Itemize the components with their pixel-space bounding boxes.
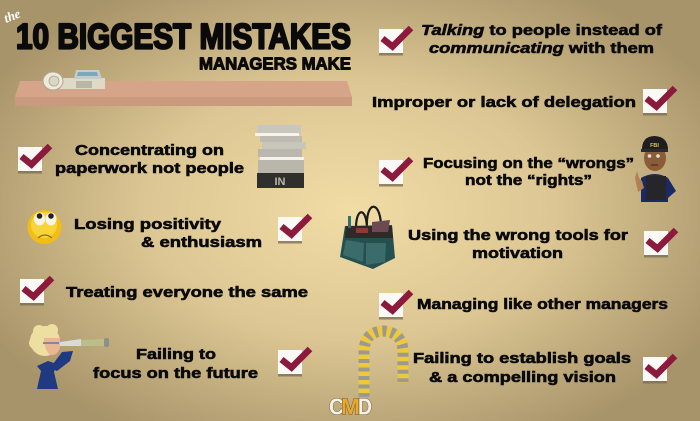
item: focusing on wrongs: Focusing on the “wrongs” <box>423 155 634 172</box>
title: the <box>2 6 23 26</box>
illustration: woman with telescope <box>29 324 109 389</box>
item: wrong tools <box>408 227 676 262</box>
icon: worried emoji <box>28 210 62 244</box>
item: improper delegation <box>372 88 675 116</box>
item: losing positivity <box>74 216 310 251</box>
item: losing positivity: & enthusiasm <box>141 234 262 251</box>
title: 10 BIGGEST MISTAKES <box>16 18 351 56</box>
item: managing like others <box>379 292 668 320</box>
item: concentrating on paperwork: Concentrating on <box>75 142 224 159</box>
item: talking vs communicating <box>379 22 663 57</box>
item: focusing on wrongs <box>379 155 634 189</box>
item: failing to focus on the future: Failing to <box>136 346 216 363</box>
item: wrong tools: motivation <box>472 245 563 262</box>
item: goals and vision <box>413 350 675 386</box>
illustration: desk shelf with telephone <box>15 70 352 106</box>
item: managing like others: Managing like other managers <box>417 296 668 313</box>
item: talking vs communicating: Talking to people instead of <box>421 22 663 39</box>
item: failing to focus on the future <box>93 346 310 382</box>
item: wrong tools: Using the wrong tools for <box>408 227 628 244</box>
icon: tool bag <box>340 207 395 269</box>
item: losing positivity: Losing positivity <box>74 216 222 233</box>
logo: CMD: D <box>358 394 372 420</box>
item: talking vs communicating: communicating with them <box>429 40 654 57</box>
item: failing to focus on the future: focus on the future <box>93 365 258 382</box>
illustration: FBI agent <box>635 136 676 202</box>
title: MANAGERS MAKE <box>199 54 351 74</box>
illustration: FBI agent: FBI <box>650 143 659 149</box>
item: focusing on wrongs: not the “rights” <box>465 172 592 189</box>
logo: CMD: M <box>341 394 360 420</box>
illustration: chain arch <box>364 331 403 397</box>
item: improper delegation: Improper or lack of delegation <box>372 94 636 111</box>
item: concentrating on paperwork: paperwork not people <box>55 160 244 177</box>
item: concentrating on paperwork <box>18 142 244 177</box>
item: goals and vision: Failing to establish goals <box>413 350 631 367</box>
icon: paper stack in tray: IN <box>274 176 286 188</box>
title <box>2 6 351 74</box>
item: goals and vision: & a compelling vision <box>429 369 616 386</box>
item: treating everyone the same <box>20 278 308 306</box>
logo: CMD: C <box>329 394 344 420</box>
item: treating everyone the same: Treating everyone the same <box>66 284 308 301</box>
icon: paper stack in tray <box>255 125 306 188</box>
logo: CMD <box>329 394 372 420</box>
